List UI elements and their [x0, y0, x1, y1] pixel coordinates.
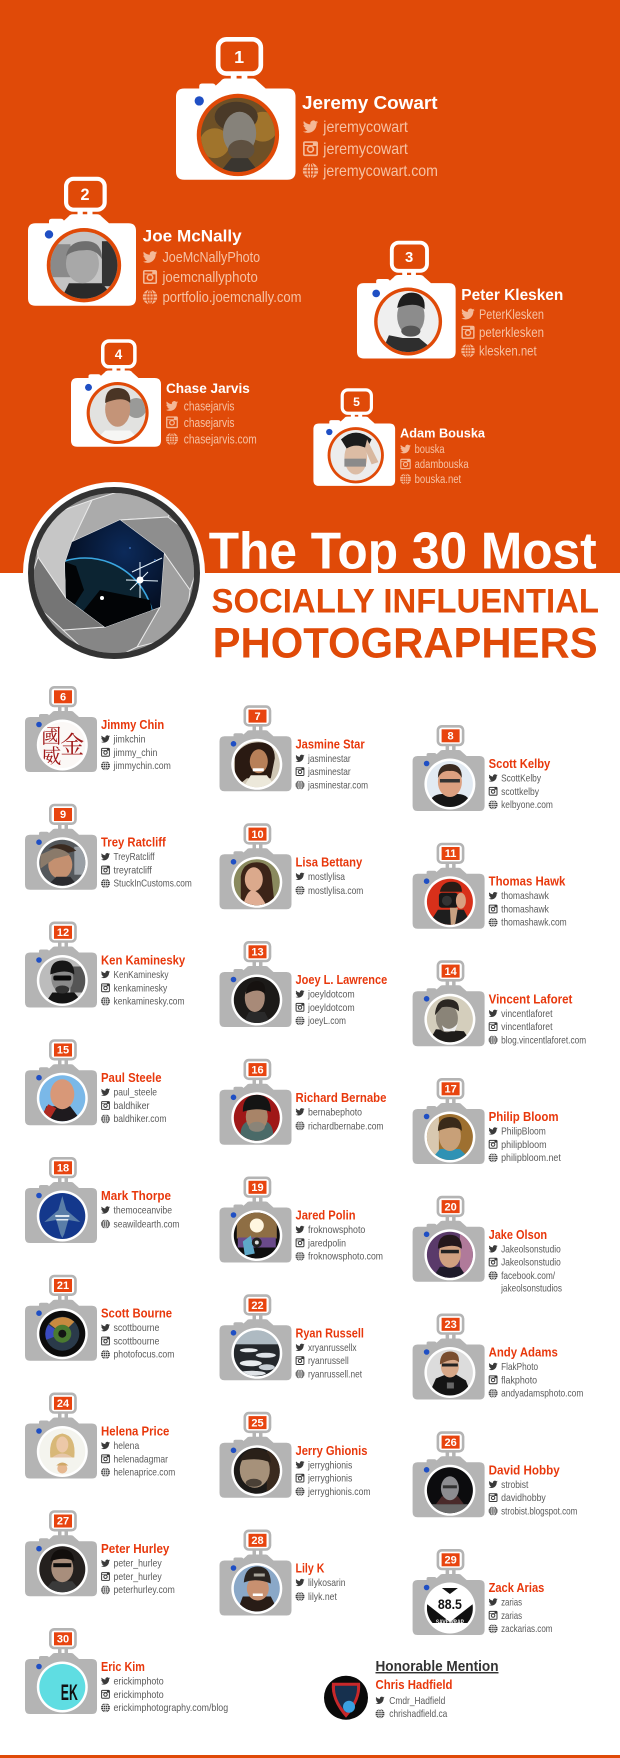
camera with portrait: 2 [80, 186, 90, 204]
social links: chasejarvis [184, 416, 234, 430]
social links: ryanrussell.net [308, 1368, 362, 1380]
card: rank 26 David Hobby [413, 1433, 578, 1517]
card: rank 3 Peter Klesken [357, 243, 563, 359]
social links: kenkaminesky [114, 982, 168, 994]
social links: philipbloom.net [501, 1152, 561, 1164]
name: Zack Arias [489, 1581, 544, 1595]
rank: 16 [251, 1064, 264, 1076]
social links: jerryghionis.com [307, 1486, 371, 1498]
rank: 13 [251, 946, 264, 958]
name: Helena Price [101, 1424, 169, 1438]
photo [233, 1094, 281, 1142]
social links: thomashawk [501, 904, 550, 916]
name: Philip Bloom [489, 1110, 559, 1124]
camera body [413, 1550, 485, 1635]
social links: thomashawk.com [501, 917, 567, 929]
name: Thomas Hawk [489, 875, 565, 889]
name: Eric Kim [101, 1660, 145, 1674]
heading: Honorable Mention [376, 1659, 498, 1675]
photo: 88.5 logo: 88.5 [438, 1596, 462, 1612]
name: Scott Kelby [489, 757, 550, 771]
photo [233, 858, 281, 906]
social links [296, 871, 363, 897]
social links: jakeolsonstudios [500, 1282, 562, 1294]
name: Lisa Bettany [296, 855, 362, 869]
social links [489, 772, 553, 811]
social links: treyratcliff [114, 865, 152, 877]
social links: zarias [501, 1596, 522, 1608]
camera with portrait [71, 341, 161, 447]
social links [489, 1126, 561, 1164]
camera body [413, 726, 485, 811]
social links: strobist [501, 1479, 528, 1491]
photo [233, 1447, 281, 1495]
social links: paul_steele [114, 1087, 157, 1099]
rank: 30 [57, 1634, 69, 1646]
social links: helenadagmar [114, 1453, 168, 1465]
rank: 10 [251, 829, 264, 841]
photo: 88.5 logo [426, 1584, 474, 1632]
camera body [25, 687, 97, 772]
rank: 11 [445, 848, 456, 860]
social links: flakphoto [501, 1374, 537, 1386]
social links [101, 969, 185, 1008]
social links [489, 1479, 578, 1517]
social links: erickimphoto [114, 1689, 164, 1701]
rank: 14 [444, 966, 458, 978]
name: Peter Hurley [101, 1542, 169, 1556]
social links [101, 734, 171, 772]
social links: scottbourne [114, 1335, 160, 1347]
social links: jasminestar [307, 766, 351, 778]
name: Jeremy Cowart [302, 93, 438, 113]
name: Joey L. Lawrence [296, 973, 387, 987]
aperture lens emblem with earth [23, 482, 205, 659]
name: Jared Polin [296, 1208, 356, 1222]
social links: klesken.net [479, 344, 537, 358]
social links [101, 851, 192, 890]
camera with portrait: 3 [405, 250, 413, 266]
social links: seawildearth.com [114, 1218, 180, 1230]
photo: red seal: 威 [41, 740, 61, 769]
social links [376, 1695, 447, 1720]
photo [233, 740, 281, 788]
rank: 17 [444, 1084, 457, 1096]
background: orange header [0, 0, 620, 573]
card: rank 13 Joey L. Lawrence [220, 942, 387, 1027]
social links [143, 250, 302, 306]
rank: 12 [57, 927, 69, 939]
card: rank 12 Ken Kaminesky [25, 923, 185, 1008]
social links [101, 1676, 228, 1714]
social links: vincentlaforet [501, 1021, 553, 1033]
card: rank 8 Scott Kelby [413, 726, 553, 811]
social links [489, 1243, 562, 1294]
card: rank 9 Trey Ratcliff [25, 805, 192, 890]
social links: jerryghionis [307, 1459, 352, 1471]
camera with portrait [28, 179, 136, 306]
camera body [220, 1296, 292, 1380]
rank: 24 [57, 1398, 70, 1410]
photo [426, 1231, 474, 1279]
social links: joeyldotcom [307, 1002, 355, 1014]
rank: 19 [251, 1182, 264, 1194]
card: rank 10 Lisa Bettany [220, 825, 363, 909]
social links [296, 753, 368, 791]
social links: FlakPhoto [501, 1361, 538, 1373]
card: rank 14 Vincent Laforet [413, 962, 586, 1046]
social links: froknowsphoto [308, 1224, 365, 1236]
camera with portrait [176, 39, 296, 180]
camera body [25, 1276, 97, 1361]
camera body [220, 707, 292, 791]
social links: mostlylisa [308, 871, 345, 883]
social links: joemcnallyphoto [162, 270, 258, 286]
rank: 6 [60, 692, 66, 704]
social links: baldhiker.com [114, 1113, 167, 1125]
photo [426, 1113, 474, 1161]
camera body [413, 1433, 485, 1517]
social links: Jakeolsonstudio [501, 1243, 561, 1255]
social links: philipbloom [501, 1139, 547, 1151]
social links: themoceanvibe [114, 1204, 172, 1216]
camera body [413, 1315, 485, 1400]
social links: xryanrussellx [308, 1342, 357, 1354]
card: rank 6 Jimmy Chin [25, 687, 171, 772]
card: rank 1 Jeremy Cowart [176, 39, 438, 180]
rank: 18 [57, 1162, 69, 1174]
camera body [25, 1158, 97, 1243]
social links: vincentlaforet [501, 1008, 553, 1020]
rank: 22 [251, 1300, 264, 1312]
card: rank 15 Paul Steele [25, 1040, 167, 1125]
card: rank 23 Andy Adams [413, 1315, 583, 1400]
name: Scott Bourne [101, 1307, 172, 1321]
rank: 7 [254, 711, 261, 723]
card: rank 20 Jake Olson [413, 1197, 562, 1294]
card: rank 30 Eric Kim [25, 1629, 228, 1714]
social links: mostlylisa.com [308, 885, 363, 897]
social links: jeremycowart.com [322, 163, 438, 180]
name: Vincent Laforet [489, 992, 573, 1006]
camera body [220, 942, 292, 1027]
social links [296, 1224, 383, 1262]
name: Jake Olson [489, 1228, 547, 1242]
social links: jimmychin.com [113, 760, 171, 772]
camera body [220, 1413, 292, 1498]
social links [296, 1106, 384, 1132]
social links [296, 1577, 346, 1603]
name: Jimmy Chin [101, 718, 164, 732]
social links: jasminestar [307, 753, 351, 765]
rank: 23 [444, 1319, 457, 1331]
social links: jimmy_chin [113, 747, 158, 759]
social links: bouska.net [415, 474, 462, 486]
card: rank 28 Lily K [220, 1531, 346, 1616]
social links: peter_hurley [114, 1558, 162, 1570]
camera body [220, 1178, 292, 1262]
social links: helena [114, 1440, 139, 1452]
camera body [220, 1060, 292, 1145]
photo [38, 1074, 86, 1122]
social links: blog.vincentlaforet.com [501, 1034, 586, 1046]
title: SOCIALLY INFLUENTIAL [212, 582, 599, 620]
photo [38, 839, 86, 887]
card: rank 2 Joe McNally [28, 179, 302, 306]
card: rank 27 Peter Hurley [25, 1512, 175, 1596]
card: rank 4 Chase Jarvis [71, 341, 257, 447]
social links: peterklesken [479, 325, 544, 340]
social links: photofocus.com [114, 1349, 175, 1361]
social links [101, 1440, 175, 1478]
name: Joe McNally [143, 227, 242, 246]
photo [233, 976, 281, 1024]
social links: ryanrussell [308, 1355, 349, 1367]
camera body [413, 1079, 485, 1164]
social links: chrishadfield.ca [389, 1708, 447, 1720]
card: rank 19 Jared Polin [220, 1178, 383, 1262]
camera with portrait: 5 [353, 395, 360, 409]
card: rank 21 Scott Bourne [25, 1276, 175, 1361]
photo [233, 1564, 281, 1612]
card: rank 18 Mark Thorpe [25, 1158, 180, 1243]
camera body [413, 844, 485, 929]
social links: facebook.com/ [501, 1270, 555, 1282]
social links: StuckInCustoms.com [114, 878, 192, 890]
name: Ryan Russell [296, 1326, 364, 1340]
social links [303, 119, 438, 180]
camera body [25, 1512, 97, 1596]
social links [400, 444, 469, 486]
social links: jimkchin [113, 734, 146, 746]
card: rank 25 Jerry Ghionis [220, 1413, 371, 1498]
name: Chris Hadfield [376, 1677, 453, 1692]
social links: helenaprice.com [114, 1466, 175, 1478]
social links: PeterKlesken [479, 307, 544, 322]
social links: bernabephoto [308, 1106, 362, 1118]
social links [101, 1322, 175, 1361]
rank: 27 [57, 1516, 69, 1528]
social links: ScottKelby [501, 772, 542, 784]
camera body [220, 1531, 292, 1616]
social links: chasejarvis.com [184, 432, 257, 446]
social links: jasminestar.com [307, 779, 368, 791]
photo: sea [233, 1329, 281, 1377]
social links [101, 1558, 175, 1596]
photo: camera lens [38, 1310, 86, 1358]
social links: adambouska [415, 459, 469, 471]
photo [233, 1212, 281, 1260]
card: rank 29 Zack Arias [413, 1550, 553, 1635]
social links: JoeMcNallyPhoto [162, 250, 260, 266]
rank: 28 [251, 1535, 264, 1547]
name: Adam Bouska [400, 425, 486, 440]
name: Ken Kaminesky [101, 954, 185, 968]
social links: jeremycowart [322, 141, 408, 158]
photo [426, 1466, 474, 1514]
card: rank 7 Jasmine Star [220, 707, 368, 791]
social links: PhilipBloom [501, 1126, 546, 1138]
photo [38, 1545, 86, 1593]
social links: zackarias.com [501, 1623, 553, 1635]
social links: lilykosarin [308, 1577, 346, 1589]
camera body [25, 805, 97, 890]
social links: jaredpolin [307, 1237, 346, 1249]
social links: kenkaminesky.com [114, 996, 185, 1008]
social links [461, 307, 544, 358]
name: Andy Adams [489, 1346, 558, 1360]
rank: 26 [444, 1437, 457, 1449]
social links: peter_hurley [114, 1571, 162, 1583]
camera with portrait: 1 [234, 47, 244, 67]
social links [489, 1008, 586, 1046]
card: rank 5 Adam Bouska [313, 390, 486, 486]
photo: red seal [40, 722, 85, 768]
camera body [25, 1040, 97, 1125]
photo: 88.5 logo: SAVEWRAP [436, 1620, 464, 1626]
social links: froknowsphoto.com [308, 1250, 383, 1262]
card: rank 22 Ryan Russell [220, 1296, 364, 1380]
name: Mark Thorpe [101, 1189, 171, 1203]
rank: 25 [251, 1417, 264, 1429]
social links: thomashawk [501, 890, 550, 902]
camera body [413, 1197, 485, 1282]
social links: lilyk.net [308, 1591, 337, 1603]
camera with portrait [313, 390, 395, 486]
social links [101, 1087, 167, 1125]
name: Paul Steele [101, 1071, 162, 1085]
camera body [25, 1629, 97, 1714]
social links: Jakeolsonstudio [501, 1257, 561, 1269]
social links: strobist.blogspot.com [501, 1505, 578, 1517]
rank: 20 [444, 1201, 457, 1213]
social links [296, 1459, 371, 1498]
camera with portrait [357, 243, 456, 359]
social links: KenKaminesky [114, 969, 169, 981]
camera body [25, 923, 97, 1008]
title [209, 522, 599, 667]
photo: red seal: 國 [41, 720, 61, 749]
name: Trey Ratcliff [101, 836, 167, 850]
social links: davidhobby [501, 1492, 546, 1504]
mission patch [324, 1676, 368, 1720]
photo: EK logo: EK [61, 1680, 78, 1705]
social links: TreyRatcliff [114, 851, 155, 863]
photo [426, 995, 474, 1043]
social links [489, 890, 567, 929]
social links: scottkelby [501, 786, 540, 798]
honorable mention: Chris Hadfield [324, 1659, 498, 1720]
rank: 9 [60, 809, 66, 821]
name: David Hobby [489, 1463, 560, 1477]
photo: shark [38, 1192, 86, 1240]
social links: joeyL.com [307, 1015, 346, 1027]
name: Peter Klesken [461, 287, 563, 304]
rank: 21 [57, 1280, 69, 1292]
social links [296, 988, 355, 1027]
name: Chase Jarvis [166, 380, 250, 396]
card: rank 16 Richard Bernabe [220, 1060, 386, 1145]
camera body [220, 825, 292, 909]
social links [489, 1361, 583, 1400]
name: Lily K [296, 1562, 324, 1576]
photo [426, 878, 474, 926]
social links: portfolio.joemcnally.com [162, 290, 302, 306]
name: Richard Bernabe [296, 1091, 386, 1105]
photo [426, 1348, 474, 1396]
rank: 29 [444, 1554, 457, 1566]
social links [489, 1596, 553, 1635]
social links: peterhurley.com [114, 1584, 175, 1596]
social links: kelbyone.com [501, 799, 553, 811]
name: Jasmine Star [296, 737, 365, 751]
social links: bouska [415, 444, 445, 456]
social links: chasejarvis [184, 400, 234, 414]
social links: scottbourne [114, 1322, 160, 1334]
title: PHOTOGRAPHERS [213, 619, 598, 667]
social links [296, 1342, 362, 1380]
camera body [25, 1394, 97, 1478]
social links: erickimphoto [114, 1676, 164, 1688]
photo [38, 1428, 86, 1476]
card: rank 24 Helena Price [25, 1394, 175, 1478]
social links [101, 1204, 180, 1230]
social links: joeyldotcom [307, 988, 355, 1000]
photo [38, 956, 86, 1004]
social links: zarias [501, 1610, 522, 1622]
social links: Cmdr_Hadfield [389, 1695, 445, 1707]
social links: andyadamsphoto.com [501, 1388, 583, 1400]
photo: red seal: 金 [60, 725, 84, 760]
rank: 15 [57, 1045, 69, 1057]
social links: erickimphotography.com/blog [114, 1702, 228, 1714]
photo: EK logo [38, 1663, 86, 1711]
card: rank 11 Thomas Hawk [413, 844, 567, 929]
photo [426, 760, 474, 808]
social links: jerryghionis [307, 1473, 352, 1485]
camera with portrait: 4 [115, 347, 123, 362]
social links: richardbernabe.com [308, 1120, 384, 1132]
social links: jeremycowart [322, 119, 408, 136]
title: The Top 30 Most [209, 522, 597, 580]
name: Jerry Ghionis [296, 1444, 367, 1458]
rank: 8 [448, 730, 454, 742]
social links [166, 400, 257, 446]
card: rank 17 Philip Bloom [413, 1079, 561, 1164]
camera body [413, 962, 485, 1046]
social links: baldhiker [114, 1100, 150, 1112]
